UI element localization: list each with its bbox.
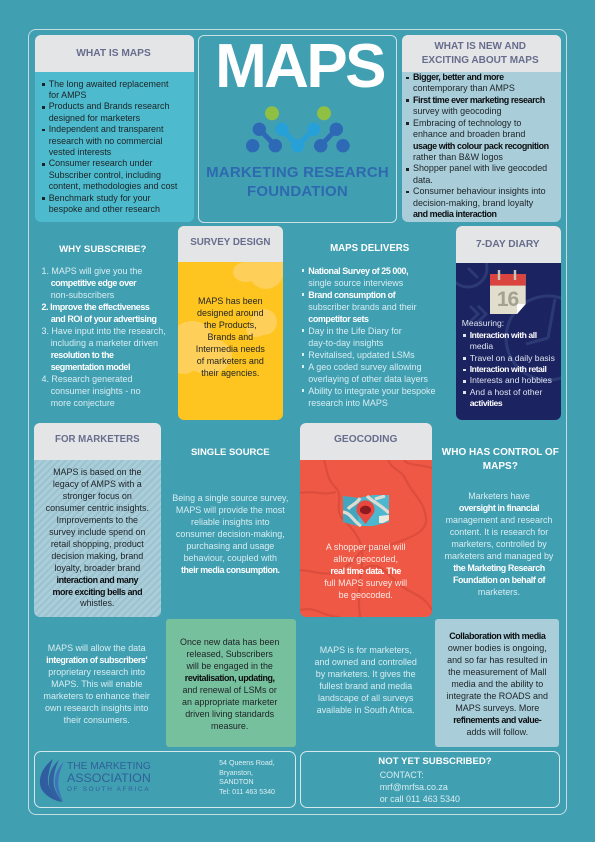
text: data integration: their consumers. bbox=[64, 715, 130, 725]
text: why subscribe list: 1. MAPS will give you the bbox=[42, 266, 142, 276]
title: MAPS: MAPS bbox=[215, 32, 384, 101]
text: for marketers: MAPS is based on the bbox=[53, 467, 142, 477]
text: MAPS is for marketers: and owned and controlled bbox=[314, 657, 417, 667]
icon: swoosh logo bbox=[40, 759, 64, 802]
text: what is MAPS list: content, methodologies and cost bbox=[49, 181, 177, 191]
logo text: the marketing association: ASSOCIATION bbox=[67, 771, 151, 785]
text: who has control: Marketers have bbox=[468, 491, 530, 501]
text: collaboration: Collaboration with media bbox=[449, 631, 545, 641]
text: data integration: own research insights into bbox=[45, 703, 148, 713]
text: what is new list: Bigger, better and more bbox=[413, 72, 504, 82]
text: collaboration: adds will follow. bbox=[466, 727, 528, 737]
text: what is new list: enhance and broaden brand bbox=[413, 129, 525, 139]
text: what is new list: rather than B&W logos bbox=[413, 152, 503, 162]
text: for marketers: interaction and many bbox=[57, 575, 138, 585]
logo text: the marketing association bbox=[67, 761, 151, 793]
heading: who has control of MAPS bbox=[442, 447, 559, 472]
text: for marketers: more exciting bells and bbox=[52, 587, 142, 597]
text: what is MAPS list: The long awaited replacement bbox=[49, 78, 168, 88]
text: for marketers: consumer centric insights. bbox=[46, 503, 149, 513]
text: MAPS is for marketers: fullest brand and media bbox=[319, 681, 412, 691]
text: MAPS delivers list: research into MAPS bbox=[308, 398, 388, 408]
text: 7-day diary measuring list: media bbox=[470, 341, 493, 351]
panel: revitalisation bbox=[166, 619, 296, 747]
text: who has control: content. It is research for bbox=[450, 527, 548, 537]
panel: footer marketing association bbox=[34, 751, 296, 808]
text: 7-day diary measuring list bbox=[462, 318, 555, 408]
text: for marketers bbox=[46, 467, 149, 608]
text: 7-day diary measuring list: Interests and hobbies bbox=[470, 375, 552, 385]
text: what is new list: Embracing of technology to bbox=[413, 118, 521, 128]
heading: survey design: SURVEY DESIGN bbox=[190, 237, 270, 248]
text: why subscribe list: resolution to the bbox=[51, 350, 114, 360]
panel: MAPS logo bbox=[198, 34, 396, 222]
text: what is MAPS list bbox=[42, 78, 178, 214]
text: data integration: MAPS. This will enable bbox=[51, 679, 142, 689]
text: revitalisation: released, Subscribers bbox=[186, 649, 273, 659]
text: who has control bbox=[445, 491, 554, 597]
text: geocoding: allow geocoded, bbox=[333, 554, 398, 564]
text: single source: consumer decision-making, bbox=[176, 529, 285, 539]
text: data integration: proprietary research into bbox=[48, 667, 145, 677]
text: who has control: management and research bbox=[446, 515, 552, 525]
text: what is MAPS list: Benchmark study for your bbox=[49, 193, 151, 203]
panel: geocoding bbox=[300, 423, 432, 617]
text: who has control: oversight in financial bbox=[459, 503, 539, 513]
heading: why subscribe: WHY SUBSCRIBE? bbox=[59, 244, 146, 255]
heading: what is MAPS: WHAT IS MAPS bbox=[76, 48, 151, 58]
text: MAPS delivers list: Revitalised, updated LSMs bbox=[308, 350, 415, 360]
text: survey design: the Products, bbox=[204, 320, 257, 330]
text: for marketers: stronger focus on bbox=[63, 491, 132, 501]
panel: for marketers bbox=[34, 423, 161, 617]
text: revitalisation: Once new data has been bbox=[180, 637, 279, 647]
text: why subscribe list: 2. Improve the effectiveness bbox=[42, 302, 149, 312]
text: MAPS delivers list: single source interviews bbox=[308, 278, 403, 288]
logo text: Marketing Research Foundation: MARKETING RESEARCH bbox=[206, 164, 389, 180]
text: geocoding: A shopper panel will bbox=[326, 542, 405, 552]
text: survey design: designed around bbox=[197, 308, 264, 318]
text: collaboration: refinements and value- bbox=[453, 715, 541, 725]
text: MAPS delivers list: Ability to integrate your bespoke bbox=[308, 386, 435, 396]
text: MAPS delivers list: Brand consumption of bbox=[308, 290, 395, 300]
text: single source: MAPS will provide the most bbox=[176, 505, 285, 515]
text: why subscribe list: competitive edge over bbox=[51, 278, 136, 288]
text: who has control: Foundation on behalf of bbox=[453, 575, 545, 585]
icon: calendar: 16 bbox=[497, 288, 519, 311]
text: contact bbox=[380, 770, 460, 804]
panel: footer not yet subscribed bbox=[300, 751, 560, 808]
heading: for marketers: FOR MARKETERS bbox=[55, 434, 140, 445]
panel: survey design bbox=[178, 226, 283, 420]
text: for marketers: Improvements to the bbox=[57, 515, 138, 525]
heading: who has control of MAPS: WHO HAS CONTROL OF bbox=[442, 447, 559, 458]
heading: MAPS delivers: MAPS DELIVERS bbox=[330, 243, 409, 254]
heading: geocoding: GEOCODING bbox=[334, 434, 397, 445]
text: data integration bbox=[44, 643, 150, 725]
text: why subscribe list: 4. Research generated bbox=[42, 374, 132, 384]
text: who has control: marketers, controlled by bbox=[451, 539, 547, 549]
text: MAPS delivers list: day-to-day insights bbox=[308, 338, 383, 348]
text: why subscribe list: consumer insights - no bbox=[51, 386, 141, 396]
text: what is new list: usage with colour pack recognition bbox=[413, 141, 549, 151]
text: collaboration: integrate the ROADS and bbox=[447, 691, 548, 701]
text: MAPS is for marketers: MAPS is for marketers, bbox=[320, 645, 412, 655]
text: what is MAPS list: Consumer research under bbox=[49, 158, 153, 168]
decoration: clouds bbox=[178, 262, 283, 374]
text: collaboration bbox=[447, 631, 548, 737]
text: who has control: the Marketing Research bbox=[453, 563, 545, 573]
text: 7-day diary measuring list: Measuring: bbox=[462, 318, 504, 328]
text: single source: behaviour, coupled with bbox=[184, 553, 277, 563]
text: MAPS is for marketers: landscape of all surveys bbox=[318, 693, 413, 703]
text: geocoding: full MAPS survey will bbox=[324, 578, 407, 588]
text: what is new list: data. bbox=[413, 175, 433, 185]
heading: what is new and exciting: WHAT IS NEW AND bbox=[434, 40, 526, 52]
text: revitalisation: revitalisation, updating, bbox=[185, 673, 275, 683]
text: what is MAPS list: designed for marketers bbox=[49, 113, 140, 123]
text: address: Tel: 011 463 5340 bbox=[219, 788, 275, 796]
logo text: the marketing association: THE MARKETING bbox=[67, 761, 151, 772]
text: MAPS delivers list: National Survey of 25 000, bbox=[308, 266, 408, 276]
text: address: SANDTON bbox=[219, 778, 254, 786]
text: collaboration: MAPS surveys. More bbox=[455, 703, 539, 713]
icon: Marketing Research Foundation logo bbox=[246, 106, 350, 152]
text: MAPS delivers list: competitor sets bbox=[308, 314, 369, 324]
text: MAPS delivers list: A geo coded survey allowing bbox=[308, 362, 422, 372]
text: address: 54 Queens Road, bbox=[219, 759, 275, 767]
text: for marketers: survey include spend on bbox=[49, 527, 145, 537]
decoration: clocks bbox=[456, 263, 561, 382]
text: MAPS delivers list: Day in the Life Diary for bbox=[308, 326, 402, 336]
text: data integration: MAPS will allow the data bbox=[48, 643, 146, 653]
text: what is new list: contemporary than AMPS bbox=[413, 83, 515, 93]
text: collaboration: media and the ability to bbox=[451, 679, 543, 689]
text: survey design: Intermedia needs bbox=[196, 344, 265, 354]
text: why subscribe list: and ROI of your advertising bbox=[51, 314, 157, 324]
text: why subscribe list: non-subscribers bbox=[51, 290, 114, 300]
text: revitalisation bbox=[180, 637, 279, 731]
panel: what is MAPS bbox=[34, 34, 194, 222]
text: geocoding bbox=[324, 542, 407, 600]
text: MAPS is for marketers: available in South Africa. bbox=[317, 705, 415, 715]
text: for marketers: retail shopping, product bbox=[51, 539, 144, 549]
text: collaboration: and so far has resulted in bbox=[447, 655, 547, 665]
text: what is new list: Shopper panel with live geocoded bbox=[413, 163, 547, 173]
text: 7-day diary measuring list: Interaction with retail bbox=[470, 364, 546, 374]
heading: 7-day diary: 7-DAY DIARY bbox=[476, 239, 540, 250]
text: geocoding: real time data. The bbox=[330, 566, 401, 576]
text: what is MAPS list: Subscriber control, including bbox=[49, 170, 161, 180]
text: what is MAPS list: research with no commercial bbox=[49, 136, 162, 146]
text: what is new list: First time ever marketing research bbox=[413, 95, 545, 105]
text: who has control: marketers. bbox=[478, 587, 520, 597]
text: contact: mrf@mrfsa.co.za bbox=[380, 782, 448, 792]
text: revitalisation: driven living standards bbox=[185, 709, 274, 719]
text: data integration: integration of subscribers' bbox=[46, 655, 147, 665]
text: single source: their media consumption. bbox=[181, 565, 280, 575]
heading: what is new and exciting bbox=[422, 40, 539, 66]
text: single source: purchasing and usage bbox=[186, 541, 274, 551]
text: 7-day diary measuring list: And a host of other bbox=[470, 387, 542, 397]
heading: not yet subscribed: NOT YET SUBSCRIBED? bbox=[378, 756, 492, 766]
logo text: Marketing Research Foundation: FOUNDATION bbox=[247, 182, 348, 200]
text: address: Bryanston, bbox=[219, 769, 253, 777]
text: MAPS delivers list: subscriber brands and their bbox=[308, 302, 417, 312]
text: what is new list: survey with geocoding bbox=[413, 106, 501, 116]
text: MAPS is for marketers: by marketers. It gives the bbox=[316, 669, 416, 679]
text: survey design: their agencies. bbox=[201, 368, 259, 378]
panel: 7-day diary bbox=[456, 226, 561, 420]
logo text: Marketing Research Foundation bbox=[206, 164, 389, 200]
text: collaboration: owner bodies is ongoing, bbox=[448, 643, 547, 653]
heading: who has control of MAPS: MAPS? bbox=[483, 461, 518, 472]
text: why subscribe list: more conjecture bbox=[51, 398, 115, 408]
text: survey design bbox=[196, 296, 265, 378]
text: for marketers: whistles. bbox=[80, 598, 114, 608]
panel: what is new bbox=[402, 34, 561, 222]
text: what is MAPS list: for AMPS bbox=[49, 90, 86, 100]
heading: what is new and exciting: EXCITING ABOUT MAPS bbox=[422, 54, 539, 66]
text: why subscribe list: including a marketer driven bbox=[51, 338, 158, 348]
text: contact: or call 011 463 5340 bbox=[380, 794, 460, 804]
heading: single source: SINGLE SOURCE bbox=[191, 447, 270, 458]
text: why subscribe list bbox=[42, 266, 166, 408]
text: revitalisation: an appropriate marketer bbox=[182, 697, 277, 707]
text: 7-day diary measuring list: activities bbox=[470, 398, 502, 408]
text: what is new list bbox=[406, 72, 549, 219]
text: revitalisation: and renewal of LSMs or bbox=[182, 685, 277, 695]
text: what is MAPS list: Products and Brands research bbox=[49, 101, 169, 111]
text: MAPS is for marketers bbox=[314, 645, 417, 715]
icon: calendar bbox=[490, 270, 526, 314]
text: for marketers: decision making, brand bbox=[51, 551, 143, 561]
text: contact: CONTACT: bbox=[380, 770, 424, 780]
text: single source bbox=[172, 493, 288, 575]
text: what is new list: and media interaction bbox=[413, 209, 497, 219]
text: why subscribe list: 3. Have input into the research, bbox=[42, 326, 166, 336]
text: survey design: MAPS has been bbox=[198, 296, 263, 306]
panel: collaboration bbox=[435, 619, 559, 747]
text: for marketers: loyalty, broader brand bbox=[54, 563, 140, 573]
text: revitalisation: will be engaged in the bbox=[186, 661, 273, 671]
text: what is MAPS list: Independent and transparent bbox=[49, 124, 163, 134]
text: data integration: marketers to enhance their bbox=[44, 691, 150, 701]
text: who has control: marketers and managed by bbox=[445, 551, 553, 561]
text: geocoding: be geocoded. bbox=[339, 590, 393, 600]
text: single source: Being a single source survey, bbox=[172, 493, 288, 503]
text: revitalisation: measure. bbox=[211, 721, 248, 731]
text: address bbox=[219, 759, 275, 796]
text: why subscribe list: segmentation model bbox=[51, 362, 130, 372]
text: 7-day diary measuring list: Travel on a daily basis bbox=[470, 353, 555, 363]
text: for marketers: legacy of AMPS with a bbox=[53, 479, 142, 489]
icon: map with pin bbox=[343, 495, 389, 527]
text: collaboration: the measurement of Mall bbox=[448, 667, 546, 677]
decoration: map lines bbox=[300, 460, 432, 617]
logo text: the marketing association: OF SOUTH AFRICA bbox=[67, 786, 150, 793]
text: MAPS delivers list bbox=[302, 266, 436, 408]
text: 7-day diary measuring list: Interaction with all bbox=[470, 330, 537, 340]
text: single source: reliable insights into bbox=[191, 517, 270, 527]
text: what is MAPS list: bespoke and other research bbox=[49, 204, 160, 214]
text: survey design: of marketers and bbox=[197, 356, 264, 366]
text: survey design: Brands and bbox=[207, 332, 253, 342]
text: what is new list: decision-making, brand loyalty bbox=[413, 198, 533, 208]
text: what is new list: Consumer behaviour insights into bbox=[413, 186, 546, 196]
text: what is MAPS list: vested interests bbox=[49, 147, 111, 157]
text: MAPS delivers list: overlaying of other data layers bbox=[308, 374, 428, 384]
